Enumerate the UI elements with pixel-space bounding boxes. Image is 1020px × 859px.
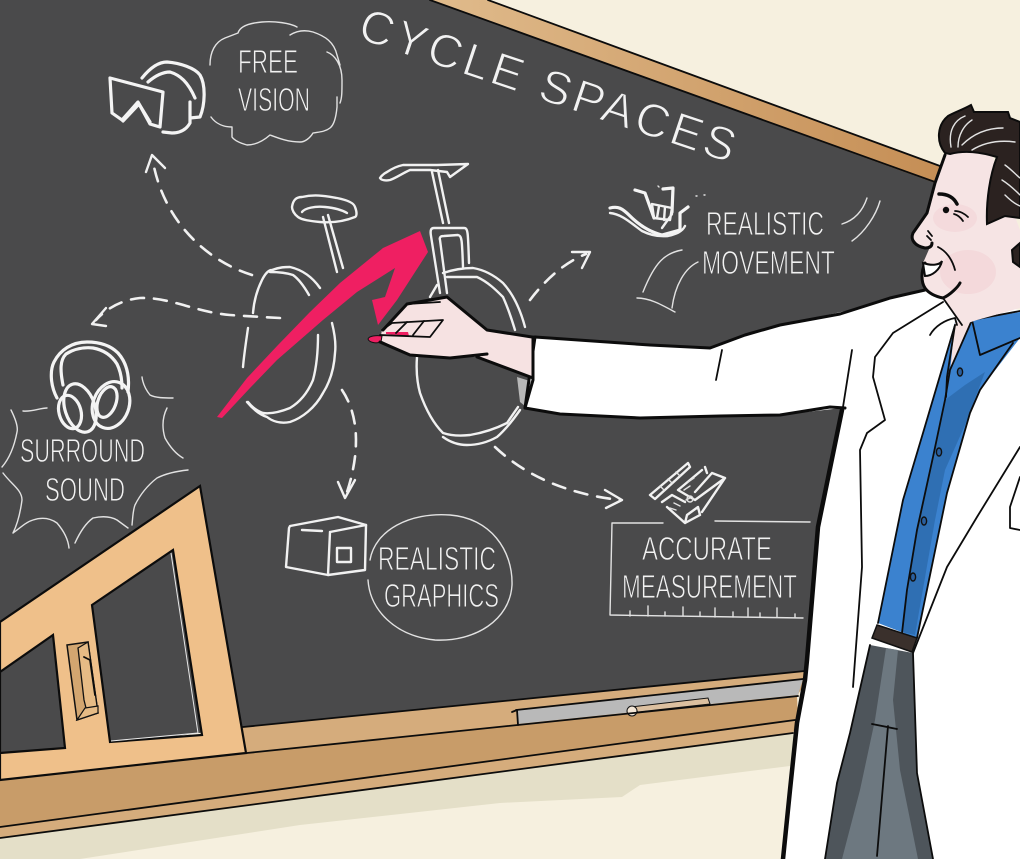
icon: VR goggles	[110, 62, 204, 133]
shirt details	[878, 311, 1020, 638]
concept: realistic movement	[530, 186, 880, 312]
arrow to surround sound	[92, 298, 280, 326]
label: graphics: GRAPHICS	[384, 577, 499, 614]
hand holding chalk	[368, 297, 533, 408]
chalk tray	[0, 671, 807, 838]
shirt shade	[902, 372, 985, 635]
face and neck	[912, 150, 1020, 325]
seat post	[323, 215, 343, 272]
circle outline	[368, 515, 512, 640]
concept: free vision	[110, 22, 342, 275]
chalk	[368, 336, 382, 343]
label: sound: SOUND	[45, 471, 125, 508]
concept: realistic graphics	[286, 390, 512, 640]
left wheel	[243, 267, 335, 423]
label: realistic: REALISTIC	[378, 540, 496, 577]
icon: box	[286, 517, 366, 575]
floor shadow	[0, 733, 800, 859]
label: measurement: MEASUREMENT	[622, 568, 797, 605]
concept: accurate measurement	[495, 447, 810, 618]
arrow to realistic movement	[530, 252, 590, 300]
cuff shadow	[517, 377, 533, 406]
cheek blush	[933, 204, 977, 232]
label: surround: SURROUND	[20, 432, 145, 469]
label: free: FREE	[238, 43, 298, 80]
arrow to accurate measurement	[495, 447, 622, 508]
hair	[939, 105, 1020, 267]
lab coat	[525, 290, 1020, 859]
bicycle sketch	[243, 164, 525, 445]
right wheel	[417, 268, 525, 445]
icon: motion platform	[610, 186, 705, 236]
ruler outline	[610, 521, 810, 618]
label: movement: MOVEMENT	[702, 244, 835, 281]
label: accurate: ACCURATE	[642, 530, 772, 567]
handlebar	[380, 164, 468, 180]
arrow to realistic graphics	[338, 390, 356, 498]
red stroke arrow	[217, 231, 428, 418]
motion strokes	[637, 198, 880, 312]
set square handle	[67, 642, 98, 720]
arrow to free vision	[146, 155, 252, 275]
icon: headphones	[51, 342, 136, 436]
label: vision: VISION	[238, 81, 310, 118]
ruler ticks	[630, 606, 795, 617]
neck v	[950, 320, 972, 372]
top wooden frame	[430, 0, 940, 183]
trousers	[825, 645, 933, 859]
face outline	[912, 155, 968, 325]
set square triangle	[0, 486, 246, 780]
belt	[872, 625, 917, 652]
label: realistic: REALISTIC	[706, 205, 824, 242]
seat	[292, 195, 356, 222]
thought cloud	[210, 22, 342, 145]
shirt	[878, 312, 1020, 638]
concept: surround sound	[2, 298, 280, 548]
head tube	[431, 228, 469, 293]
coat outline	[525, 290, 1020, 859]
stem	[432, 170, 449, 223]
speech burst	[2, 377, 188, 548]
professor figure	[368, 105, 1020, 859]
title: Cycle Spaces: CYCLE SPACES	[353, 0, 743, 173]
icon: circuit board	[650, 463, 725, 523]
chalk eraser holder	[512, 679, 803, 725]
